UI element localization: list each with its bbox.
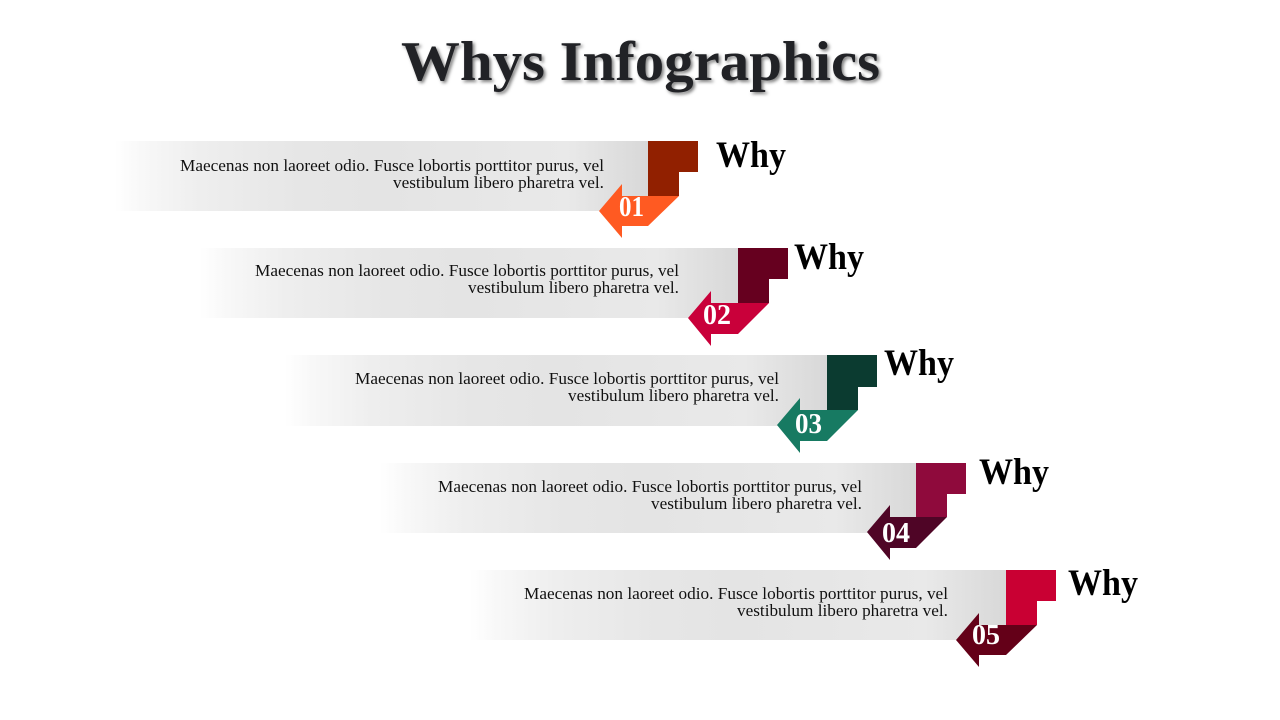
row 2 [200, 237, 864, 346]
heading why 1: Why [716, 135, 786, 176]
heading why 3: Why [884, 343, 954, 384]
number 02: 02 [703, 300, 731, 331]
body text 3 [355, 369, 779, 405]
text band 1 [115, 141, 648, 211]
stepped block 1 [648, 141, 698, 196]
stepped block 5 [1006, 570, 1056, 625]
body text 1: Maecenas non laoreet odio. Fusce lobortis porttitor purus, vel [180, 156, 604, 175]
body text 4: Maecenas non laoreet odio. Fusce lobortis porttitor purus, vel [438, 477, 862, 496]
stepped block 3 [827, 355, 877, 410]
row 4 [380, 452, 1049, 560]
number 04: 04 [882, 518, 910, 549]
text band 4 [380, 463, 916, 533]
row 1 [115, 135, 786, 238]
heading why 5: Why [1068, 563, 1138, 604]
arrow 4 [867, 505, 947, 560]
body text 5 [524, 584, 948, 620]
stepped block 2 [738, 248, 788, 303]
stepped block 4 [916, 463, 966, 517]
arrow 1 [599, 184, 679, 238]
body text 1 [180, 156, 604, 192]
body text 1: vestibulum libero pharetra vel. [393, 173, 604, 192]
title: Whys Infographics [401, 31, 880, 93]
number 01: 01 [619, 192, 644, 223]
body text 4: vestibulum libero pharetra vel. [651, 494, 862, 513]
row 3 [285, 343, 954, 453]
row 5 [470, 563, 1138, 667]
text band 5 [470, 570, 1006, 640]
text band 3 [285, 355, 827, 426]
heading why 4: Why [979, 452, 1049, 493]
body text 5: Maecenas non laoreet odio. Fusce lobortis porttitor purus, vel [524, 584, 948, 603]
arrow 3 [777, 398, 858, 453]
body text 2 [255, 261, 679, 297]
number 03: 03 [795, 409, 822, 440]
body text 3: Maecenas non laoreet odio. Fusce lobortis porttitor purus, vel [355, 369, 779, 388]
heading why 2: Why [794, 237, 864, 278]
body text 4 [438, 477, 862, 513]
body text 3: vestibulum libero pharetra vel. [568, 386, 779, 405]
number 05: 05 [972, 620, 1000, 651]
arrow 5 [956, 613, 1037, 667]
text band 2 [200, 248, 738, 318]
body text 2: vestibulum libero pharetra vel. [468, 278, 679, 297]
arrow 2 [688, 291, 769, 346]
body text 2: Maecenas non laoreet odio. Fusce lobortis porttitor purus, vel [255, 261, 679, 280]
body text 5: vestibulum libero pharetra vel. [737, 601, 948, 620]
